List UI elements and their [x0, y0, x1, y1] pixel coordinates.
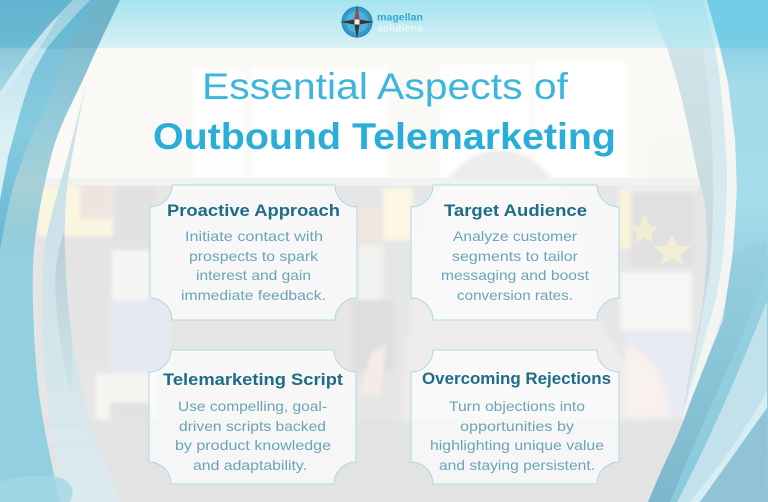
panel: Telemarketing Script: Use compelling, goal- — [178, 398, 327, 414]
title — [153, 66, 616, 157]
panel: Target Audience: Analyze customer — [453, 228, 577, 244]
icon: compass — [340, 5, 374, 39]
panel: Overcoming Rejections: Overcoming Rejections — [422, 369, 611, 388]
panel: Telemarketing Script: Telemarketing Script — [163, 370, 343, 389]
panel: Telemarketing Script: and adaptability. — [193, 457, 307, 473]
panel: Telemarketing Script — [149, 350, 356, 484]
panel: Target Audience — [411, 185, 619, 320]
title: Essential Aspects of — [202, 66, 569, 107]
panel: Overcoming Rejections: and staying persistent. — [439, 457, 595, 473]
panel: Target Audience: Target Audience — [444, 201, 587, 220]
logo: Magellan Solutions — [340, 5, 423, 39]
panel: Proactive Approach: prospects to spark — [189, 248, 319, 264]
panel: Proactive Approach: Proactive Approach — [167, 201, 340, 220]
panel: Target Audience: segments to tailor — [452, 248, 578, 264]
panel: Telemarketing Script: driven scripts backed — [179, 418, 326, 434]
panel: Telemarketing Script: by product knowledge — [175, 437, 331, 453]
logo wordmark: magellan — [377, 12, 423, 24]
panel: Overcoming Rejections: opportunities by — [460, 418, 574, 434]
panel: Proactive Approach: interest and gain — [196, 267, 311, 283]
panel: Overcoming Rejections — [411, 350, 619, 484]
panel: Target Audience: conversion rates. — [457, 287, 573, 303]
panel: Proactive Approach — [150, 185, 357, 320]
right curved ribbons — [647, 0, 768, 502]
panel: Target Audience: messaging and boost — [441, 267, 589, 283]
logo wordmark: solutions — [377, 22, 423, 34]
title: Outbound Telemarketing — [153, 116, 616, 157]
left curved ribbons — [0, 0, 120, 502]
panel: Proactive Approach: immediate feedback. — [181, 287, 326, 303]
panel: Proactive Approach: Initiate contact with — [185, 228, 323, 244]
panel: Overcoming Rejections: highlighting unique value — [430, 437, 604, 453]
logo wordmark — [377, 12, 423, 34]
panel: Overcoming Rejections: Turn objections into — [449, 398, 585, 414]
